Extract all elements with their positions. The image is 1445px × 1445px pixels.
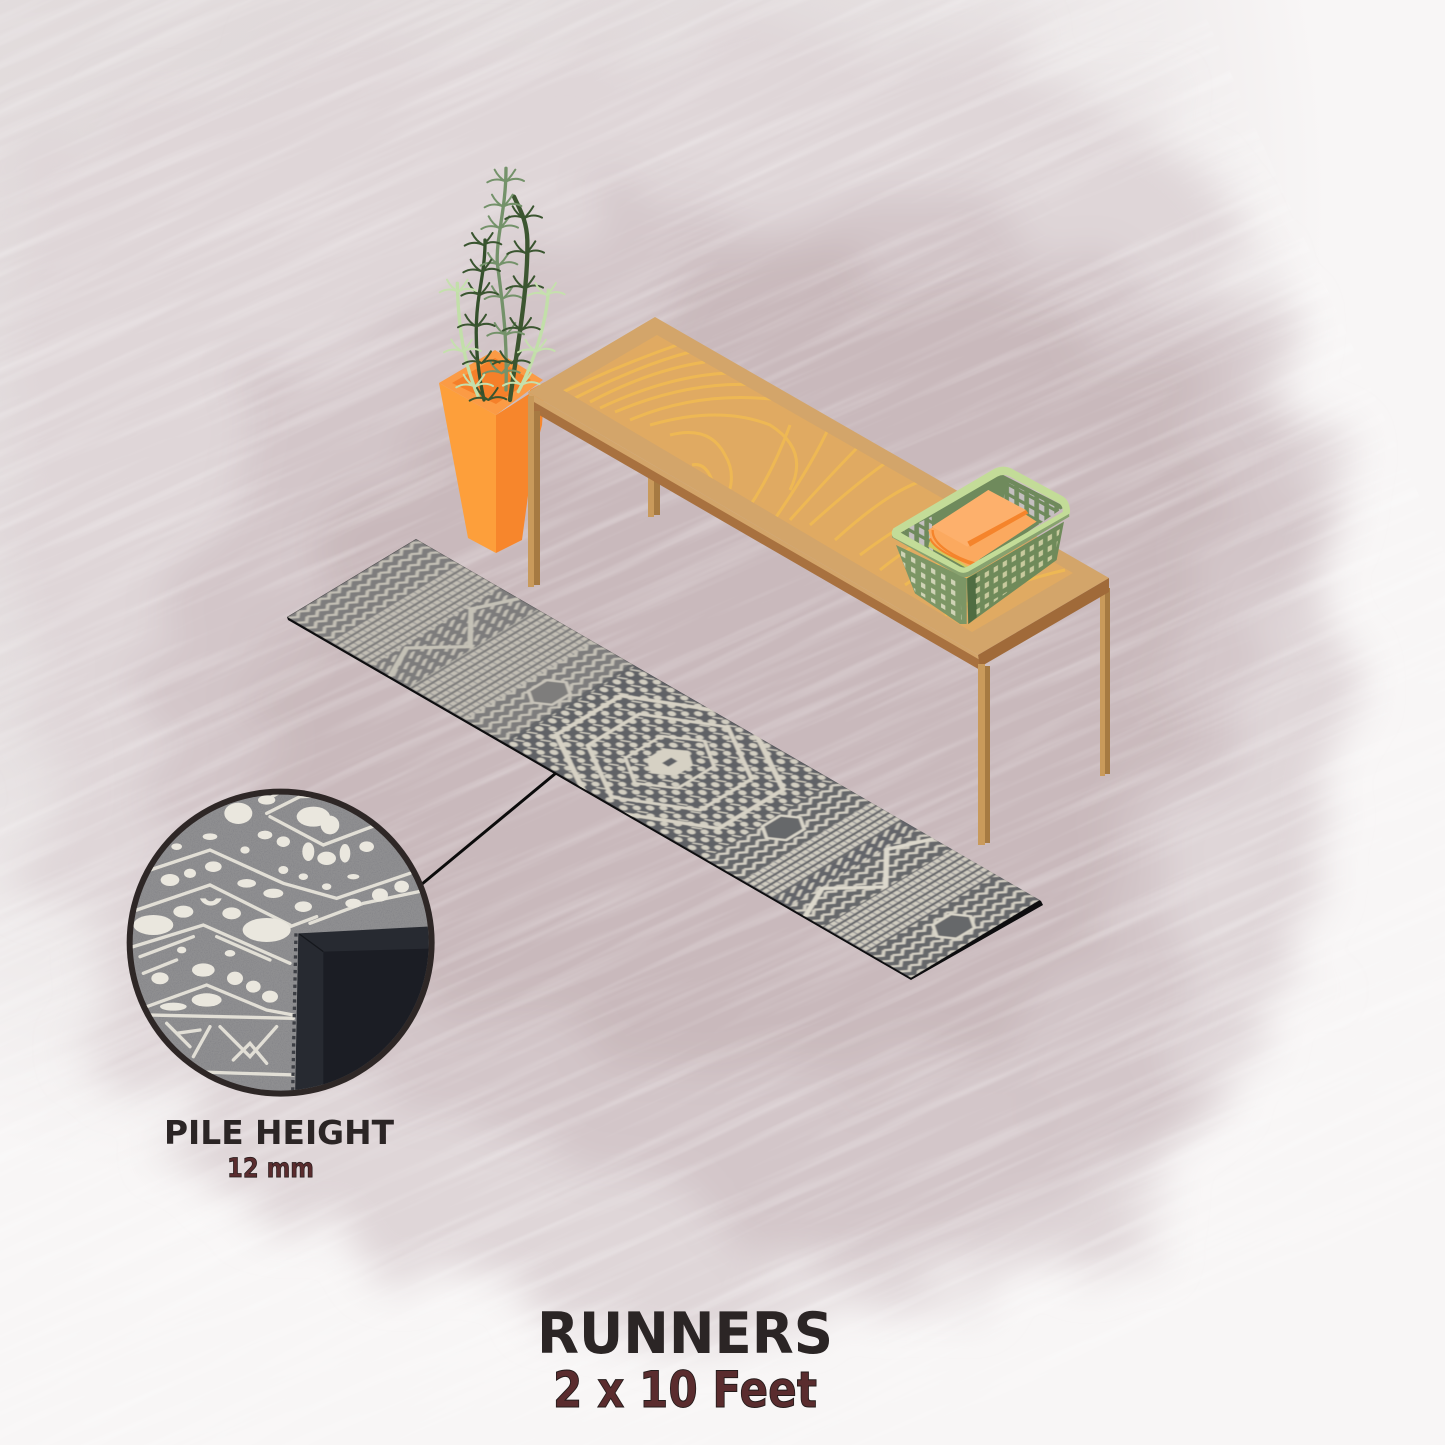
inset chevron lines	[133, 790, 427, 1075]
basket interior	[897, 473, 1065, 573]
text: pile height label: PILE HEIGHT	[164, 1113, 394, 1152]
basket left face	[896, 545, 967, 624]
console table	[528, 317, 1110, 845]
planter right face	[496, 385, 543, 553]
inset circle: pile detail	[123, 783, 440, 1100]
text: pile height value: 12 mm	[227, 1153, 314, 1184]
table front leg	[978, 664, 985, 845]
table apron	[528, 392, 980, 666]
rug faded fold at far end	[287, 539, 631, 742]
rug thickness edge	[287, 539, 1043, 980]
inset cream motifs	[133, 795, 409, 1011]
planter rim	[439, 350, 543, 415]
plant foliage	[440, 168, 565, 401]
rug central medallion	[553, 694, 787, 830]
table top	[528, 317, 1109, 655]
planter left face	[439, 383, 496, 553]
basket right face	[967, 522, 1064, 624]
inset rug backing	[295, 926, 429, 1090]
title: runners: RUNNERS	[537, 1301, 833, 1367]
rug band: end hatch left	[287, 539, 460, 642]
text: pile height label	[164, 1113, 394, 1184]
planter back face peeking behind table	[530, 382, 545, 470]
basket with folded towels	[892, 467, 1070, 624]
table wood-grain panel	[563, 335, 1073, 632]
table right leg	[1100, 590, 1105, 776]
table front-left leg	[528, 396, 534, 587]
leader line from rug to inset	[422, 773, 556, 884]
towels	[928, 490, 1037, 570]
table back leg	[648, 470, 654, 517]
basket rim	[892, 510, 1069, 577]
subtitle: size: 2 x 10 Feet	[553, 1361, 817, 1419]
rug: runner with tribal pattern	[274, 531, 1053, 986]
plant in orange planter	[439, 168, 565, 553]
